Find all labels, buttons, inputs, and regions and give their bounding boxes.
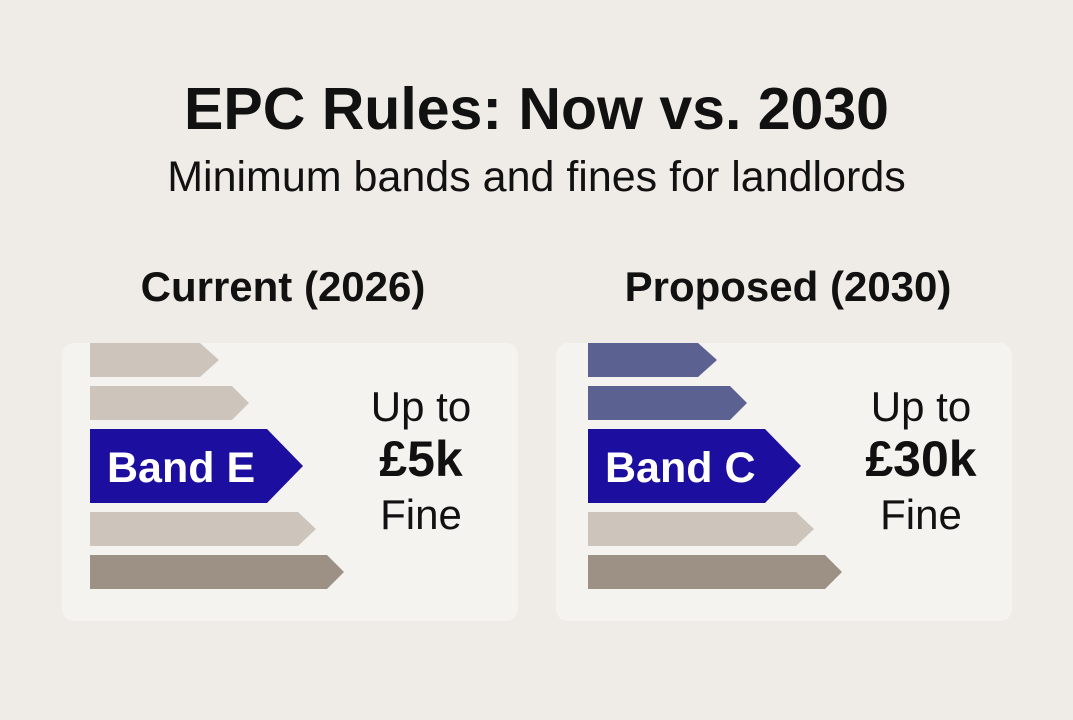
- bars: proposed: Band C: [605, 444, 756, 492]
- fine text: proposed: Fine: [880, 491, 962, 538]
- title: EPC Rules: Now vs. 2030: [184, 76, 889, 142]
- fine text: current: Fine: [380, 491, 462, 538]
- heading: proposed: Proposed (2030): [625, 263, 951, 310]
- fine text: proposed: [865, 383, 977, 538]
- bars: proposed: [588, 343, 842, 589]
- panel: current: [62, 343, 518, 621]
- subtitle: Minimum bands and fines for landlords: [167, 153, 906, 201]
- bars: current: Band E: [107, 444, 255, 492]
- bars: current: [90, 343, 344, 589]
- fine text: current: £5k: [379, 431, 463, 487]
- heading: current: Current (2026): [141, 263, 425, 310]
- fine text: proposed: £30k: [865, 431, 977, 487]
- fine text: proposed: Up to: [871, 383, 971, 430]
- fine text: current: Up to: [371, 383, 471, 430]
- fine text: current: [371, 383, 471, 538]
- panel: proposed: [556, 343, 1012, 621]
